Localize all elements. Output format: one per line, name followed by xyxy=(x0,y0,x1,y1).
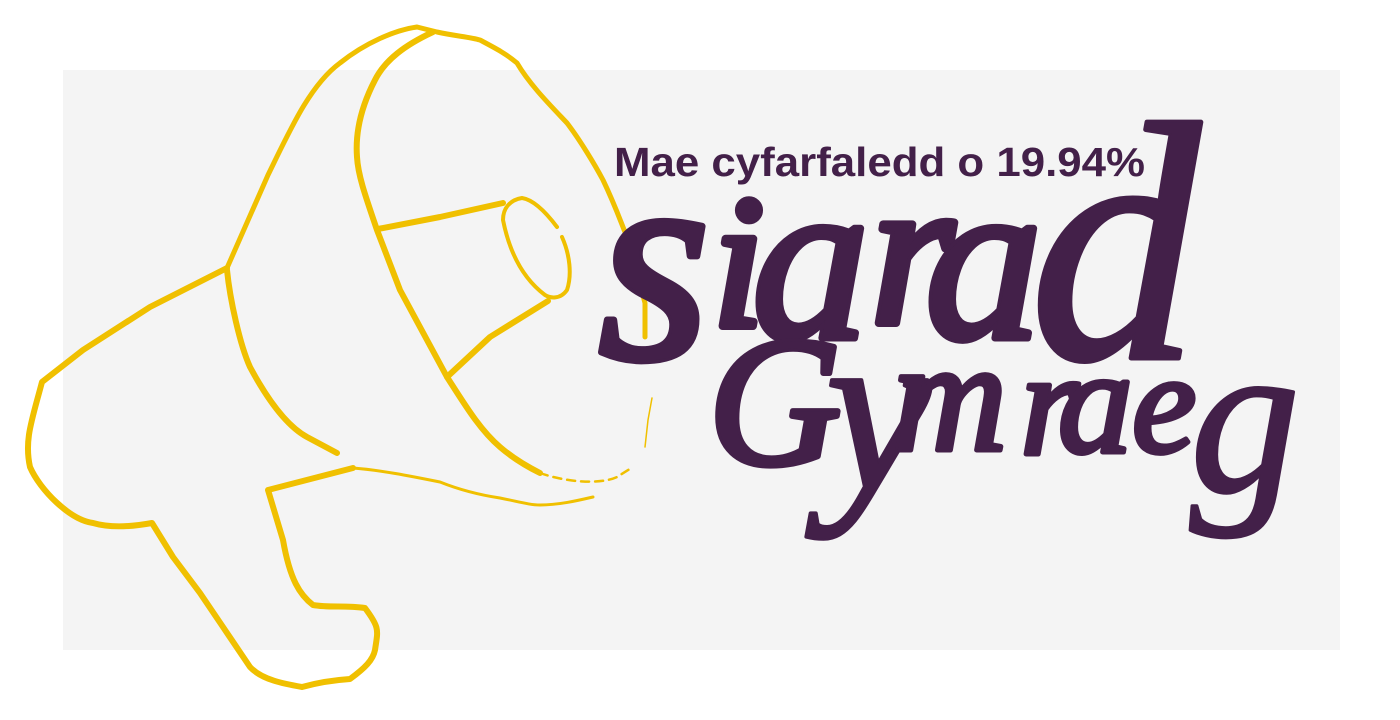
horn faded mouth xyxy=(540,467,633,482)
handle lower sweep xyxy=(353,468,593,505)
icon: megaphone outline xyxy=(28,27,652,687)
panel: grey background xyxy=(63,70,1340,650)
heading: Gymraeg brush script: y xyxy=(806,279,931,539)
heading: Gymraeg brush script: m xyxy=(892,307,1008,485)
heading: siarad brush script: i xyxy=(712,158,765,368)
heading: siarad brush script: a xyxy=(752,129,870,389)
neck opening ellipse xyxy=(503,198,570,297)
horn lower edge xyxy=(227,270,337,453)
heading: prevalence text: Mae cyfarfaledd o 19.94% xyxy=(614,139,1145,185)
neck bottom line xyxy=(447,301,548,377)
heading: Gymraeg brush script: a xyxy=(1058,319,1133,485)
heading: siarad brush script: r xyxy=(870,131,955,370)
horn outer rim xyxy=(227,27,645,337)
heading: siarad brush script: s xyxy=(598,100,711,421)
heading: Gymraeg brush script: e xyxy=(1132,324,1196,484)
horn inner rim xyxy=(357,32,540,473)
heading: Gymraeg brush script: r xyxy=(1020,321,1079,487)
horn faded edge xyxy=(645,398,652,447)
heading: siarad brush script: a xyxy=(925,129,1042,389)
heading: Gymraeg brush script: g xyxy=(1190,295,1300,539)
neck top line xyxy=(378,203,503,229)
megaphone body and handle xyxy=(28,268,377,687)
heading: siarad brush script: d xyxy=(1030,55,1205,432)
heading: Gymraeg brush script: G xyxy=(708,300,842,505)
